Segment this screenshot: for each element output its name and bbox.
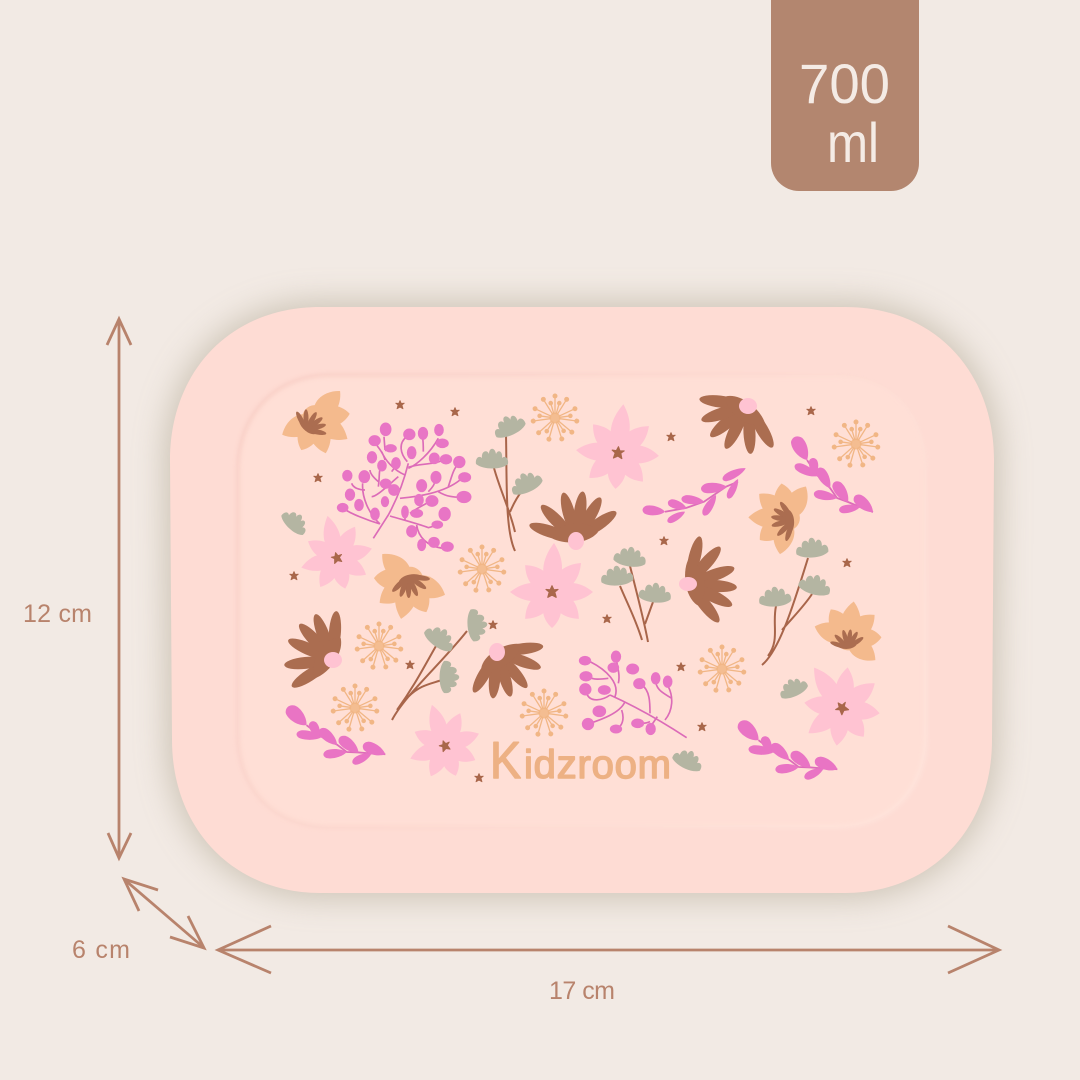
lid outer rim (170, 307, 994, 893)
lid inner panel (238, 375, 926, 827)
floral pattern (264, 373, 898, 799)
volume badge (771, 0, 919, 191)
brown fan flowers (264, 373, 786, 712)
label: 17 cm: 17 cm (549, 977, 615, 1005)
pink berry branch small (579, 651, 687, 738)
Kidzroom logo: idzroom (524, 743, 671, 787)
sage sprigs (278, 410, 833, 775)
lid shadow (170, 307, 994, 893)
Kidzroom logo (490, 732, 671, 790)
pink flowers (290, 401, 896, 788)
dandelions (330, 394, 881, 737)
pink leaf branches (281, 434, 877, 799)
volume badge: ml (827, 111, 879, 174)
Kidzroom logo: K (490, 732, 521, 790)
lunch box lid (170, 307, 994, 893)
pink berry branch large (337, 423, 471, 551)
arrow: depth 6 cm (124, 879, 204, 948)
arrow: height 12 cm (107, 319, 131, 858)
orange flowers (275, 382, 898, 670)
label: 12 cm: 12 cm (23, 600, 92, 628)
arrow: width 17 cm (218, 926, 999, 973)
stars (290, 400, 851, 782)
label: 6 cm: 6 cm (72, 936, 130, 964)
volume badge: 700 (799, 52, 890, 115)
